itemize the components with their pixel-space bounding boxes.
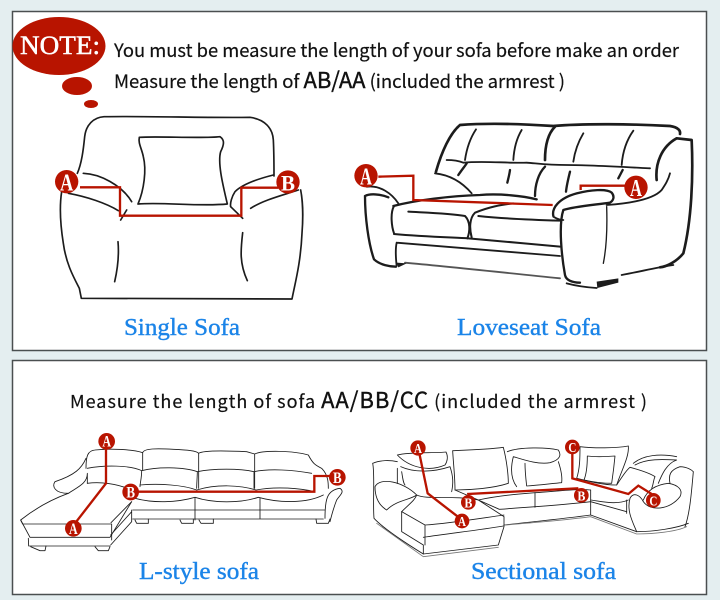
illustration: L-style sofa: A	[69, 521, 78, 538]
illustration: L-style sofa: A	[102, 434, 111, 451]
illustration: sectional sofa: A	[414, 442, 422, 457]
illustration: sectional sofa: B	[464, 496, 472, 511]
icon: note thought bubble: NOTE:	[20, 31, 100, 60]
panel: L-style and sectional sofas	[12, 360, 706, 594]
illustration: sectional sofa: A	[458, 515, 466, 530]
icon: note thought bubble	[12, 17, 106, 108]
caption: L-style sofa: L-style sofa	[139, 559, 259, 585]
illustration: single sofa	[55, 117, 303, 299]
illustration: loveseat sofa	[354, 124, 692, 288]
illustration: loveseat sofa: A	[630, 176, 642, 202]
illustration: sectional sofa: C	[649, 494, 657, 509]
illustration: L-style sofa: B	[333, 470, 342, 487]
caption: Sectional sofa: Sectional sofa	[471, 559, 616, 585]
illustration: sectional sofa	[373, 440, 693, 557]
heading: sectional measure instruction: Measure the length of sofa AA/BB/CC (included the armrest )	[70, 383, 647, 415]
illustration: sectional sofa: B	[577, 489, 585, 504]
illustration: L-style sofa	[21, 433, 346, 551]
illustration: loveseat sofa: A	[360, 165, 372, 191]
illustration: single sofa: A	[60, 171, 74, 197]
caption: Single Sofa: Single Sofa	[124, 315, 240, 341]
illustration: sectional sofa: C	[568, 441, 576, 456]
illustration: L-style sofa: B	[126, 484, 135, 501]
heading: measure instruction line 2: Measure the length of AB/AA (included the armrest )	[114, 63, 565, 95]
illustration: single sofa: B	[281, 171, 295, 196]
heading: measure instruction line 1: You must be measure the length of your sofa before make an order	[113, 37, 680, 63]
panel: single and loveseat sofas	[12, 12, 706, 350]
caption: Loveseat Sofa: Loveseat Sofa	[457, 315, 601, 341]
